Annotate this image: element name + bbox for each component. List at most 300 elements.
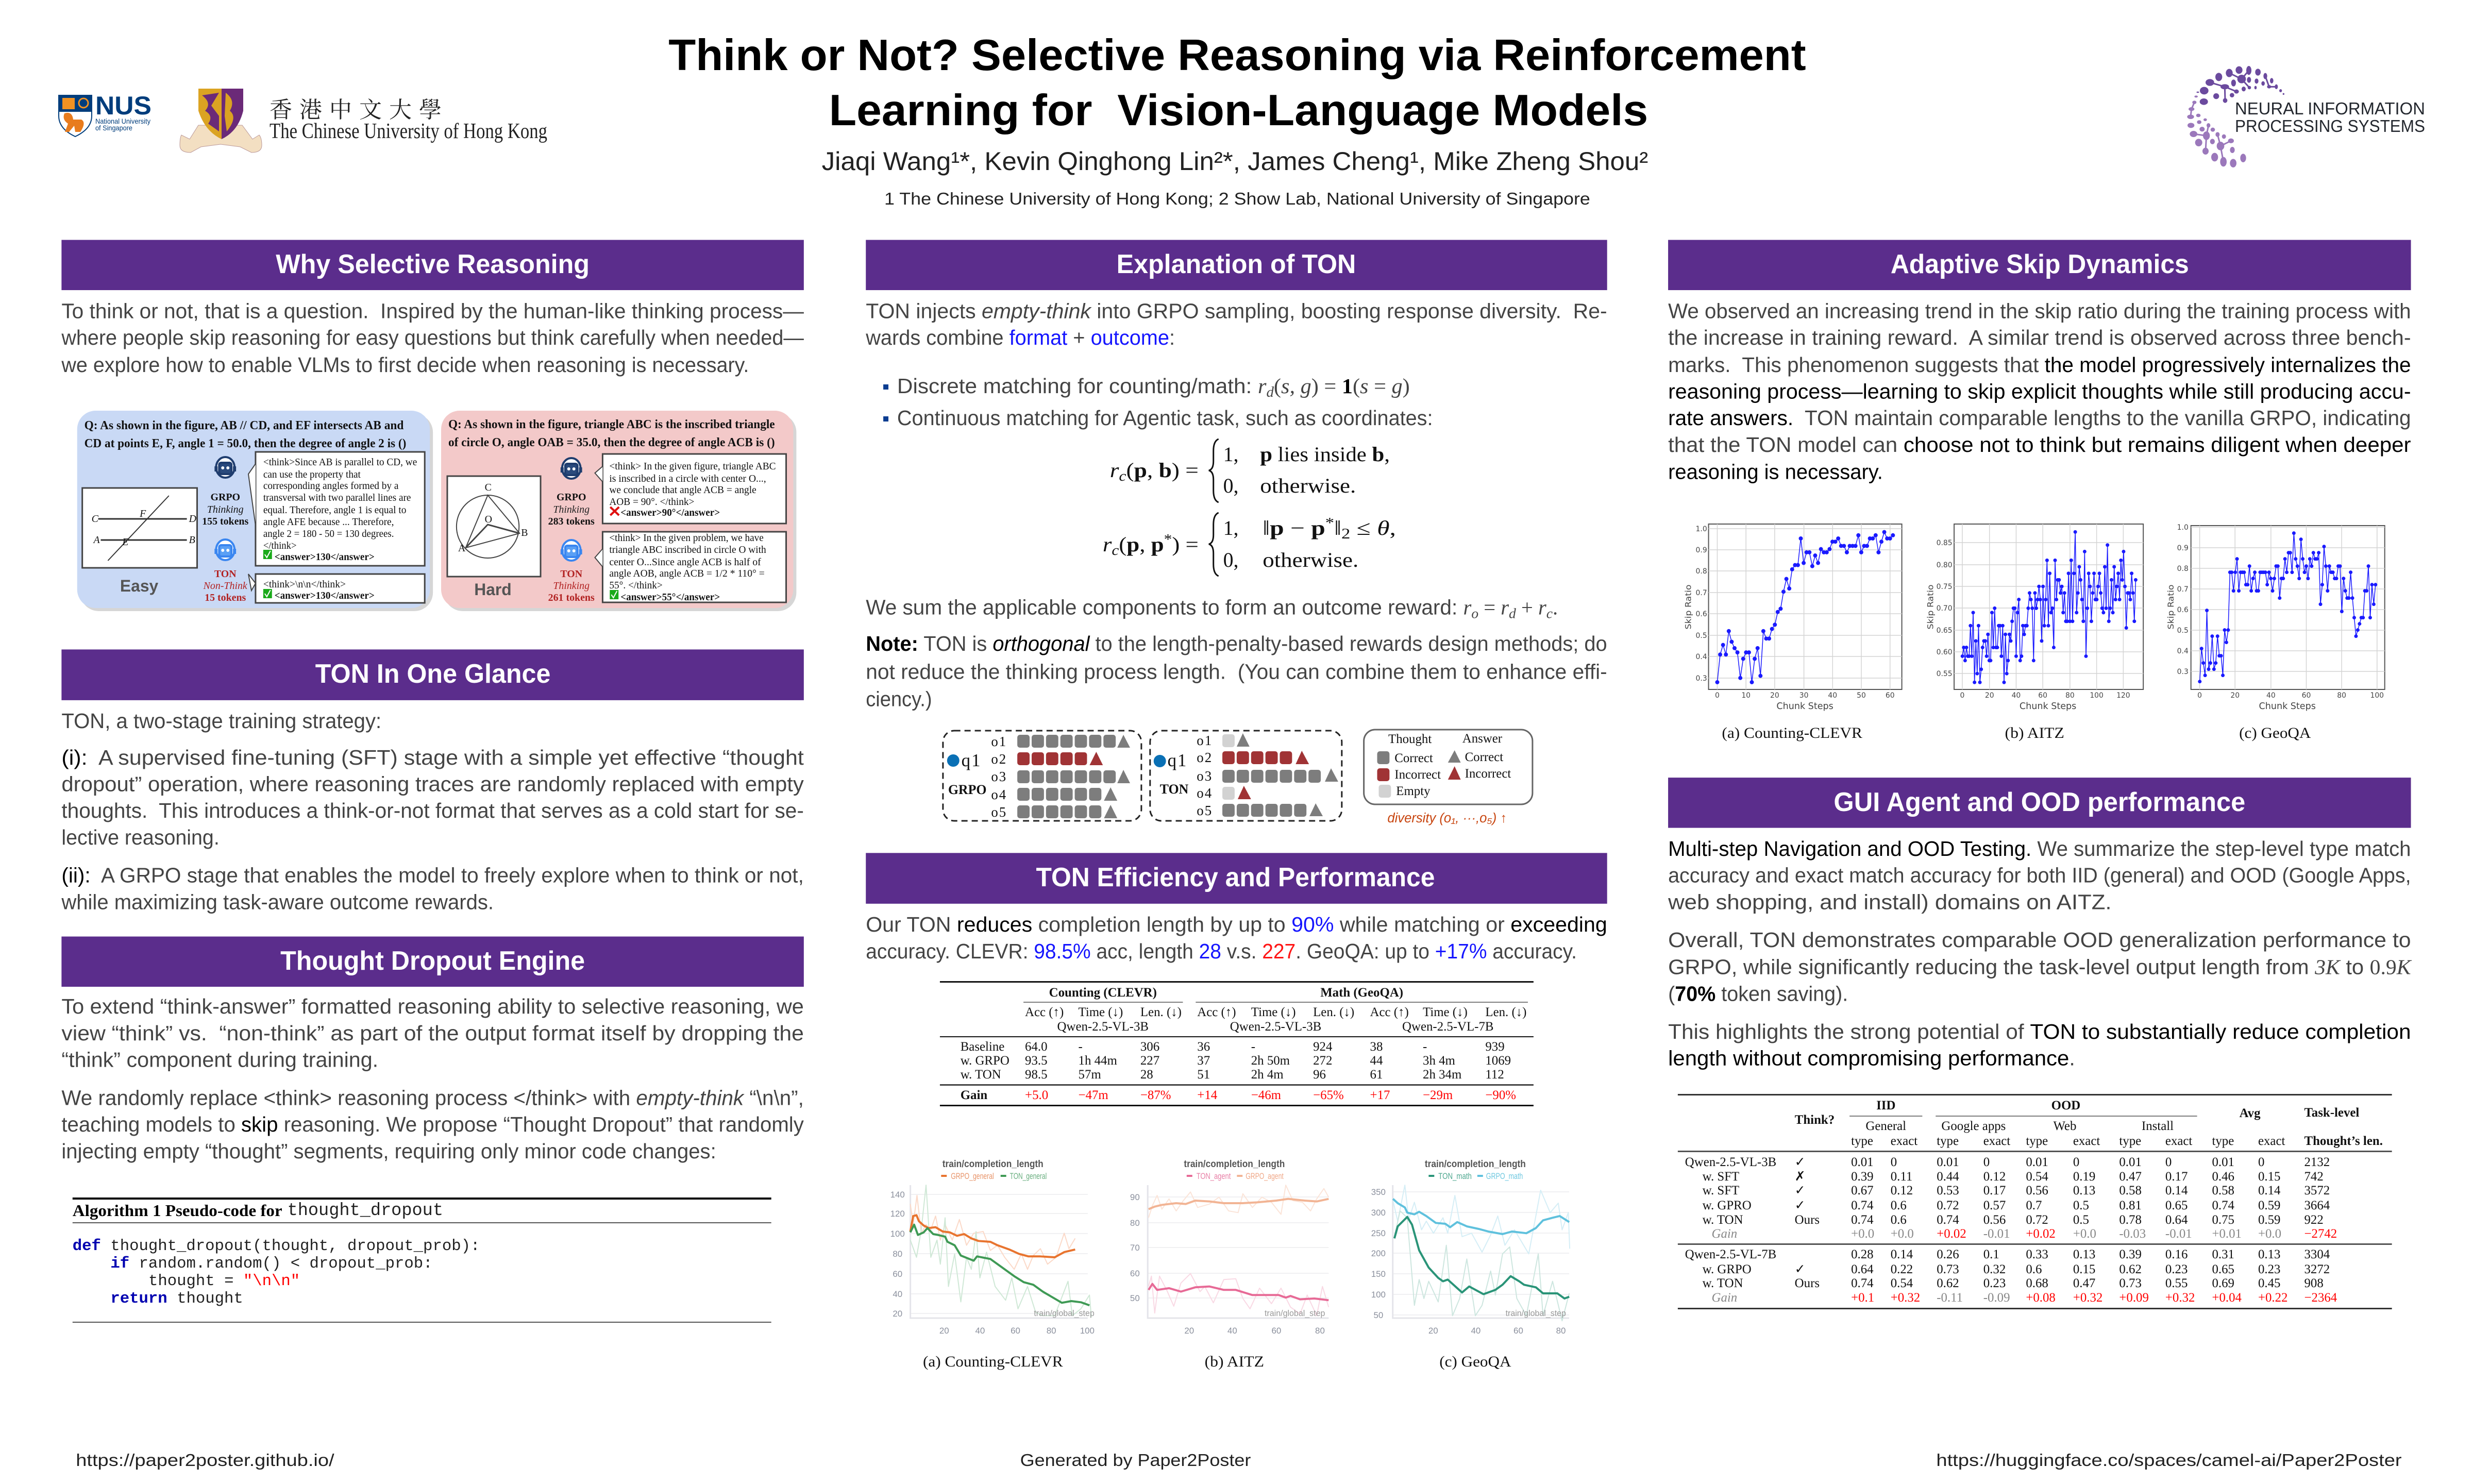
table: efficiency results: 2h 50m <box>1251 1054 1290 1068</box>
text block: outcome reward and note: ciency.) <box>866 687 932 711</box>
chart: skip ratio Counting-CLEVR: 20 <box>1770 692 1779 700</box>
bullet list with equations: Discrete matching for counting/math: r <box>897 374 1266 398</box>
table: OOD results: type <box>1851 1134 1873 1148</box>
text block: skip trend: We observed an increasing trend in the skip ratio during the training process with <box>1668 299 2411 323</box>
chart: skip ratio Counting-CLEVR: 0.5 <box>1696 632 1707 640</box>
GRPO samples <box>943 731 1141 821</box>
table: efficiency results: 37 <box>1197 1054 1210 1068</box>
table: OOD results: 0.23 <box>2258 1262 2280 1276</box>
table: OOD results: 0.7 <box>2026 1199 2042 1212</box>
table: efficiency results: 272 <box>1313 1054 1332 1068</box>
chart: skip ratio AITZ: 0.60 <box>1937 648 1953 656</box>
table: OOD results: exact <box>1891 1134 1917 1148</box>
table: OOD results: 0.13 <box>2073 1184 2095 1198</box>
text block: outcome reward and note: . <box>1553 596 1558 619</box>
table: OOD results: 0.31 <box>2212 1247 2234 1261</box>
text block: two-stage strategy: (i): A supervised fine-tuning (SFT) stage with a simple yet effective “thought <box>61 746 804 769</box>
chart: skip ratio GeoQA <box>2166 524 2385 741</box>
figure: easy example: <answer>130</answer> <box>275 590 375 601</box>
figure: easy example: corresponding angles formed by a <box>263 480 399 492</box>
figure: hard example: TON <box>560 568 583 580</box>
chart: completion length Counting-CLEVR: 80 <box>893 1249 902 1259</box>
chart: skip ratio Counting-CLEVR: 10 <box>1741 692 1751 700</box>
TON samples <box>1150 731 1342 821</box>
chart: skip ratio Counting-CLEVR: 0.4 <box>1696 653 1707 661</box>
table: OOD results: 0.74 <box>1851 1213 1874 1227</box>
text block: intro: TON injects empty-think into GRPO sampling, boosting response diversity. Re- <box>866 299 1607 323</box>
table: OOD results: 0 <box>2165 1155 2172 1169</box>
chart: completion length Counting-CLEVR: train/completion_length <box>943 1159 1044 1170</box>
table: OOD results: 0.16 <box>2165 1247 2188 1261</box>
table: OOD results: 0.47 <box>2073 1276 2095 1290</box>
table: efficiency results: - <box>1423 1040 1427 1054</box>
equation: continuous point reward <box>1103 513 1396 576</box>
equation: continuous point reward: 2 <box>1341 526 1350 542</box>
legend: Empty <box>1396 784 1431 798</box>
chart: skip ratio Counting-CLEVR: 1.0 <box>1696 525 1707 533</box>
text block: outcome reward and note <box>866 595 1607 711</box>
panel: thought dropout engine <box>61 936 804 1323</box>
chart: skip ratio AITZ: 0.85 <box>1937 539 1953 547</box>
table: OOD results: 0.47 <box>2119 1170 2142 1184</box>
table: efficiency results: −47m <box>1079 1088 1108 1102</box>
table: efficiency results: 93.5 <box>1025 1054 1048 1068</box>
table: OOD results: OOD <box>2051 1099 2080 1112</box>
figure: hard example: A <box>458 543 466 554</box>
table: OOD results: +0.0 <box>2073 1227 2096 1241</box>
chart: completion length GeoQA: (c) GeoQA <box>1439 1353 1511 1370</box>
table: OOD results: ✓ <box>1795 1262 1806 1276</box>
table: OOD results: +0.09 <box>2119 1291 2149 1305</box>
table: OOD results: +0.32 <box>2073 1291 2102 1305</box>
TON samples: TON <box>1160 782 1189 797</box>
text block: outcome reward and note: = <box>1478 596 1501 619</box>
chart: completion length Counting-CLEVR: GRPO_general <box>951 1171 994 1181</box>
table: efficiency results: 28 <box>1140 1068 1153 1082</box>
chart: completion length AITZ <box>1130 1159 1328 1370</box>
table: OOD results: 0.6 <box>1891 1213 1907 1227</box>
chart: skip ratio GeoQA: 1.0 <box>2177 524 2189 532</box>
heading: explanation of TON: Explanation of TON <box>1117 249 1356 279</box>
GRPO samples: o3 <box>991 769 1007 784</box>
figure: hard example: is inscribed in a circle with center O..., <box>609 473 766 484</box>
chart: completion length GeoQA: 40 <box>1471 1326 1481 1336</box>
chart: completion length Counting-CLEVR: 100 <box>1080 1326 1095 1336</box>
chart: skip ratio Counting-CLEVR: Skip Ratio <box>1684 584 1693 630</box>
table: OOD results: w. GRPO <box>1703 1262 1752 1276</box>
table: efficiency results: +14 <box>1197 1088 1218 1102</box>
text block: outcome reward and note: c <box>1546 605 1553 621</box>
table: OOD results: type <box>1937 1134 1959 1148</box>
chart: completion length AITZ: 60 <box>1272 1326 1281 1336</box>
table: OOD results: +0.02 <box>1937 1227 1966 1241</box>
chart: skip ratio AITZ: 100 <box>2090 692 2104 700</box>
figure: easy example: A <box>93 534 100 546</box>
algorithm: pseudo-code for thought_dropout: return thought <box>110 1290 243 1308</box>
chart: completion length GeoQA: 250 <box>1371 1228 1386 1238</box>
chart: skip ratio Counting-CLEVR: 30 <box>1799 692 1808 700</box>
table: OOD results: 0.12 <box>1983 1170 2006 1184</box>
table: OOD results: 0.01 <box>2119 1155 2142 1169</box>
text block: efficiency summary <box>866 913 1607 963</box>
authors: Jiaqi Wang¹*, Kevin Qinghong Lin²*, James Cheng¹, Mike Zheng Shou² <box>822 147 1648 176</box>
table: OOD results: 742 <box>2304 1170 2324 1184</box>
chart: completion length GeoQA: GRPO_math <box>1486 1171 1523 1181</box>
table: efficiency results: - <box>1079 1040 1083 1054</box>
equation: continuous box reward <box>1110 439 1390 502</box>
figure: easy example: Thinking <box>207 504 244 515</box>
chart: skip ratio GeoQA: 0 <box>2197 692 2202 700</box>
table: OOD results: 0.69 <box>2212 1276 2234 1290</box>
logo: NUS: NUS <box>95 91 152 120</box>
logo: NUS: of Singapore <box>95 124 132 132</box>
TON samples: o3 <box>1197 768 1213 784</box>
text block: intro: wards combine format + outcome: <box>865 326 1175 349</box>
table: OOD results: w. TON <box>1703 1213 1743 1227</box>
text block: two-stage strategy: thoughts. This introduces a think-or-not format that serves as a cold start for se- <box>61 799 804 822</box>
footer <box>76 1451 2402 1470</box>
equation: continuous box reward: ( <box>1126 459 1134 482</box>
table: OOD results: 0.72 <box>2026 1213 2048 1227</box>
table: efficiency results: Qwen-2.5-VL-3B <box>1230 1020 1321 1034</box>
chart: skip ratio AITZ: 80 <box>2065 692 2075 700</box>
table: OOD results: 0.26 <box>1937 1247 1959 1261</box>
logo: NUS <box>59 91 152 137</box>
table: efficiency results: Time (↓) <box>1079 1005 1123 1019</box>
text block: dropout description <box>61 994 804 1163</box>
chart: completion length AITZ: GRPO_agent <box>1246 1171 1284 1181</box>
chart: skip ratio AITZ: 0.65 <box>1937 627 1953 635</box>
figure: hard example: 55°. </think> <box>609 580 663 591</box>
figure: easy example: <think>\n\n</think> <box>263 579 346 590</box>
figure: easy example: F <box>139 508 146 519</box>
chart: completion length GeoQA: 200 <box>1371 1249 1386 1258</box>
text block: efficiency summary: accuracy. CLEVR: 98.5% acc, length 28 v.s. 227. GeoQA: up to +17% accuracy. <box>866 939 1577 963</box>
table: efficiency results: Baseline <box>961 1040 1004 1054</box>
heading: TON in one glance: TON In One Glance <box>315 659 550 688</box>
table: efficiency results: Acc (↑) <box>1197 1005 1236 1019</box>
chart: completion length GeoQA: 100 <box>1371 1290 1386 1300</box>
chart: completion length Counting-CLEVR: 20 <box>893 1309 902 1319</box>
chart: skip ratio GeoQA: 0.3 <box>2177 668 2189 676</box>
table: OOD results: 0.57 <box>1983 1199 2006 1212</box>
table: efficiency results: Len. (↓) <box>1313 1005 1354 1019</box>
heading: adaptive skip dynamics: Adaptive Skip Dynamics <box>1891 249 2189 279</box>
table: OOD results: Install <box>2142 1119 2174 1133</box>
affiliations: 1 The Chinese University of Hong Kong; 2 Show Lab, National University of Singapore <box>884 189 1590 208</box>
chart: completion length AITZ: 50 <box>1130 1293 1140 1303</box>
figure: hard example: <answer>90°</answer> <box>620 507 720 518</box>
figure: hard example: O <box>485 514 492 525</box>
chart: skip ratio GeoQA: 0.4 <box>2177 647 2189 655</box>
table: OOD results: 0.19 <box>2073 1170 2095 1184</box>
table: OOD results: 0.62 <box>1937 1276 1959 1290</box>
figure: easy example: C <box>92 513 99 525</box>
title <box>668 30 1806 134</box>
table: efficiency results: 38 <box>1370 1040 1383 1054</box>
figure: easy example: GRPO <box>210 492 240 503</box>
figure: easy example: 15 tokens <box>205 592 246 603</box>
table: OOD results: 0 <box>1983 1155 1990 1169</box>
equation: continuous point reward: r <box>1103 533 1112 556</box>
table: efficiency results: 2h 34m <box>1423 1068 1461 1082</box>
bullet list with equations: Continuous matching for Agentic task, such as coordinates: <box>897 406 1433 430</box>
chart: skip ratio AITZ: (b) AITZ <box>2005 724 2064 741</box>
figure: easy example: <think>Since AB is parallel to CD, we <box>263 457 417 468</box>
table: OOD results: 0.73 <box>1937 1262 1959 1276</box>
table: OOD results: 0.67 <box>1851 1184 1874 1198</box>
text block: outcome reward and note: r <box>1538 596 1546 619</box>
heading: GUI agent and OOD performance <box>1668 778 2411 828</box>
text block: OOD summary: This highlights the strong potential of TON to substantially reduce completion <box>1668 1020 2411 1043</box>
text block: dropout description: injecting empty “thought” segments, requiring only minor code changes: <box>61 1139 716 1163</box>
chart: completion length GeoQA: 350 <box>1371 1187 1386 1197</box>
chart: skip ratio AITZ: 0.55 <box>1937 670 1953 678</box>
chart: skip ratio GeoQA: 0.6 <box>2177 606 2189 614</box>
figure: hard example: <answer>55°</answer> <box>620 592 720 603</box>
figure: hard example: Thinking <box>553 504 590 515</box>
table: efficiency results: 61 <box>1370 1068 1383 1082</box>
table: OOD results: Gain <box>1712 1227 1737 1241</box>
chart: skip ratio Counting-CLEVR: (a) Counting-CLEVR <box>1722 724 1862 741</box>
algorithm: pseudo-code for thought_dropout <box>73 1198 771 1323</box>
chart: skip ratio AITZ: Skip Ratio <box>1925 584 1935 630</box>
chart: skip ratio GeoQA: 0.5 <box>2177 627 2189 635</box>
chart: completion length Counting-CLEVR: 80 <box>1047 1326 1056 1336</box>
table: efficiency results: 64.0 <box>1025 1040 1048 1054</box>
equation: continuous box reward: c <box>1119 468 1126 484</box>
table: efficiency results: −87% <box>1140 1088 1171 1102</box>
text block: two-stage strategy: lective reasoning. <box>61 825 220 849</box>
legend: Answer <box>1462 732 1503 746</box>
icon: TON robot <box>562 540 581 561</box>
text block: motivation: where people skip reasoning for easy questions but think carefully when needed— <box>61 326 804 349</box>
table: efficiency results: 3h 4m <box>1423 1054 1455 1068</box>
chart: completion length GeoQA: 50 <box>1373 1310 1383 1320</box>
table: OOD results: 0.22 <box>1891 1262 1913 1276</box>
table: efficiency results: Qwen-2.5-VL-3B <box>1057 1020 1149 1034</box>
table: OOD results: Qwen-2.5-VL-7B <box>1685 1247 1776 1261</box>
logo: NeurIPS: PROCESSING SYSTEMS <box>2235 116 2425 136</box>
chart: completion length AITZ: 80 <box>1315 1326 1325 1336</box>
figure: easy example: CD at points E, F, angle 1 = 50.0, then the degree of angle 2 is () <box>85 437 406 450</box>
table: efficiency results: 939 <box>1485 1040 1505 1054</box>
table: OOD results: 0.81 <box>2119 1199 2142 1212</box>
logo: NeurIPS: NEURAL INFORMATION <box>2235 99 2425 118</box>
chart: skip ratio GeoQA: 0.8 <box>2177 565 2189 573</box>
chart: skip ratio AITZ: 0 <box>1960 692 1964 700</box>
legend: Correct <box>1394 751 1433 765</box>
chart: skip ratio AITZ: 0.80 <box>1937 561 1953 569</box>
figure: hard example: 283 tokens <box>548 516 595 527</box>
equation: continuous box reward: p lies inside b, <box>1260 443 1390 466</box>
table: OOD results: 0.01 <box>2026 1155 2048 1169</box>
icon: GRPO robot <box>562 458 581 479</box>
table: OOD results: 3572 <box>2304 1184 2330 1198</box>
table: OOD results: 0.74 <box>2212 1199 2234 1212</box>
GRPO samples: o5 <box>991 804 1007 820</box>
text block: OOD summary: web shopping, and install) domains on AITZ. <box>1668 890 2112 914</box>
figure: easy example: transversal with two parallel lines are <box>263 492 411 503</box>
text block: OOD summary: accuracy and exact match accuracy for both IID (general) and OOD (Google Apps, <box>1668 864 2411 887</box>
table: OOD results: 0.68 <box>2026 1276 2048 1290</box>
table: efficiency results: Time (↓) <box>1423 1005 1468 1019</box>
table: OOD results: 0 <box>2073 1155 2079 1169</box>
table: OOD results: +0.0 <box>1851 1227 1874 1241</box>
table: OOD results: exact <box>2073 1134 2100 1148</box>
equation: continuous box reward: 1, <box>1223 443 1238 466</box>
chart: completion length Counting-CLEVR: 140 <box>890 1190 905 1200</box>
algorithm: pseudo-code for thought_dropout: if random.random() < dropout_prob: <box>110 1255 433 1273</box>
GRPO samples: o4 <box>991 787 1007 802</box>
chart: skip ratio Counting-CLEVR: Chunk Steps <box>1776 701 1833 712</box>
legend: Incorrect <box>1465 767 1511 781</box>
table: OOD results: 0.28 <box>1851 1247 1874 1261</box>
text block: intro <box>865 299 1607 349</box>
heading: TON in one glance <box>61 649 804 700</box>
figure: hard example: we conclude that angle ACB = angle <box>609 484 756 496</box>
table: OOD results: 0.64 <box>1851 1262 1874 1276</box>
table: OOD results: 0.75 <box>2212 1213 2234 1227</box>
text block: motivation <box>61 299 804 377</box>
table: OOD results: 0.39 <box>2119 1247 2142 1261</box>
chart: skip ratio Counting-CLEVR: 0.6 <box>1696 610 1707 618</box>
table: OOD results: Thought’s len. <box>2304 1134 2383 1148</box>
chart: skip ratio GeoQA: 60 <box>2302 692 2311 700</box>
table: OOD results: 0.01 <box>1937 1155 1959 1169</box>
text block: skip trend <box>1668 299 2411 484</box>
chart: skip ratio Counting-CLEVR: 40 <box>1828 692 1837 700</box>
table: OOD results: 0.14 <box>2165 1184 2188 1198</box>
table: OOD results: 0.5 <box>2073 1213 2089 1227</box>
chart: completion length AITZ: 40 <box>1227 1326 1237 1336</box>
figure: easy example: <answer>130</answer> <box>275 551 375 563</box>
chart: completion length AITZ: TON_agent <box>1197 1171 1231 1181</box>
table: OOD results: 0.44 <box>1937 1170 1959 1184</box>
chart: completion length Counting-CLEVR: 60 <box>893 1269 902 1279</box>
chart: skip ratio AITZ: 120 <box>2116 692 2130 700</box>
chart: completion length AITZ: train/completion_length <box>1184 1159 1285 1170</box>
title: Think or Not? Selective Reasoning via Reinforcement <box>668 30 1806 79</box>
table: OOD results: 0.73 <box>2119 1276 2142 1290</box>
table: OOD results: +0.02 <box>2026 1227 2056 1241</box>
footer link: demo: https://huggingface.co/spaces/camel-ai/Paper2Poster <box>1936 1451 2402 1470</box>
table: efficiency results: Gain <box>961 1088 987 1102</box>
table: OOD results: Task-level <box>2304 1106 2359 1120</box>
text block: two-stage strategy: while maximizing task-aware outcome rewards. <box>61 890 494 914</box>
chart: completion length GeoQA: 80 <box>1556 1326 1566 1336</box>
heading: TON efficiency and performance <box>866 853 1607 904</box>
table: OOD results: 0.15 <box>2073 1262 2095 1276</box>
equation: continuous point reward: c <box>1112 543 1119 559</box>
legend: Correct <box>1465 750 1503 764</box>
equation: continuous box reward: p, b) = <box>1134 459 1195 482</box>
table: OOD results: 2132 <box>2304 1155 2330 1169</box>
logo: CUHK: The Chinese University of Hong Kong <box>270 120 547 143</box>
table: efficiency results: Acc (↑) <box>1025 1005 1064 1019</box>
figure: hard example: AOB = 90°. </think> <box>609 496 694 508</box>
chart: completion length Counting-CLEVR: 60 <box>1011 1326 1020 1336</box>
GRPO samples: q1 <box>962 750 981 770</box>
chart: skip ratio Counting-CLEVR <box>1684 524 1902 741</box>
chart: completion length GeoQA: 150 <box>1371 1269 1386 1279</box>
table: OOD results: type <box>2026 1134 2048 1148</box>
table: OOD results: 0.12 <box>1891 1184 1913 1198</box>
table: OOD results: 0.58 <box>2212 1184 2234 1198</box>
table: OOD results: exact <box>1983 1134 2010 1148</box>
table: efficiency results: 57m <box>1079 1068 1101 1082</box>
bullet list with equations: s, g) = 1(s = g) <box>1281 375 1409 398</box>
chart: completion length Counting-CLEVR: 20 <box>939 1326 949 1336</box>
legend: Thought <box>1388 732 1432 746</box>
table: OOD results: -0.09 <box>1983 1291 2010 1305</box>
figure: easy example: TON <box>214 568 237 580</box>
table: OOD results: 0.14 <box>2258 1184 2281 1198</box>
icon: GRPO robot <box>216 457 234 478</box>
figure: hard example: center O...Since angle ACB is half of <box>609 556 761 568</box>
table: OOD results: 0.58 <box>2119 1184 2142 1198</box>
table: efficiency results: +5.0 <box>1025 1088 1048 1102</box>
table: OOD results: 0.13 <box>2258 1247 2280 1261</box>
table: OOD results: 0.23 <box>2165 1262 2188 1276</box>
figure: hard example: Q: As shown in the figure, triangle ABC is the inscribed triangle <box>448 418 775 431</box>
logo: CUHK <box>180 89 547 153</box>
table: OOD results: 0.59 <box>2258 1199 2280 1212</box>
chart: skip ratio GeoQA: 80 <box>2337 692 2346 700</box>
table: OOD results: Qwen-2.5-VL-3B <box>1685 1155 1776 1169</box>
text block: dropout description: “think” component during training. <box>61 1048 378 1072</box>
table: OOD results: 0.56 <box>1983 1213 2006 1227</box>
equation: continuous point reward: ‖p − p <box>1263 516 1322 539</box>
figure: hard example: C <box>485 482 492 493</box>
bullet list with equations: d <box>1267 384 1274 400</box>
chart: skip ratio GeoQA: 0.7 <box>2177 585 2189 594</box>
table: efficiency results: 51 <box>1197 1068 1210 1082</box>
panel: adaptive skip dynamics <box>1668 240 2411 741</box>
text block: OOD summary: Multi-step Navigation and OOD Testing. We summarize the step-level type match <box>1668 837 2411 861</box>
chart: skip ratio AITZ <box>1925 524 2143 741</box>
text block: outcome reward and note: We sum the applicable components to form an outcome reward: r <box>866 595 1471 619</box>
title: Learning for Vision-Language Models <box>829 86 1648 134</box>
TON samples: o2 <box>1197 750 1213 765</box>
chart: completion length Counting-CLEVR: 120 <box>890 1209 905 1219</box>
GRPO samples: o1 <box>991 734 1007 749</box>
text block: outcome reward and note: o <box>1471 605 1478 621</box>
table: OOD results: 0.64 <box>2165 1213 2188 1227</box>
equation: continuous point reward: ( <box>1119 533 1126 556</box>
table: efficiency results: 112 <box>1485 1068 1504 1082</box>
table: OOD results: 0.56 <box>2026 1184 2048 1198</box>
chart: skip ratio AITZ: 0.70 <box>1937 604 1953 613</box>
text block: skip trend: marks. This phenomenon suggests that the model progressively internalizes the <box>1668 353 2411 377</box>
TON samples: o4 <box>1197 785 1213 801</box>
text block: outcome reward and note: + <box>1516 596 1538 619</box>
table: OOD results: 0.74 <box>1851 1276 1874 1290</box>
table: efficiency results: Qwen-2.5-VL-7B <box>1402 1020 1493 1034</box>
text block: dropout description: To extend “think-answer” formatted reasoning ability to selective reasoning, we <box>61 994 804 1018</box>
chart: completion length GeoQA: 20 <box>1428 1326 1438 1336</box>
table: OOD results: 0.74 <box>1851 1199 1874 1212</box>
equation: continuous point reward: 1, <box>1223 516 1238 539</box>
text block: outcome reward and note: Note: TON is orthogonal to the length-penalty-based rewards design methods; do <box>866 632 1607 655</box>
logo: NeurIPS <box>2187 66 2425 167</box>
table: OOD results: +0.32 <box>2165 1291 2195 1305</box>
footer credit: Generated by Paper2Poster <box>1020 1451 1251 1470</box>
equation: continuous point reward: ) = <box>1172 533 1199 556</box>
text block: outcome reward and note: d <box>1509 605 1516 621</box>
equation: continuous box reward: otherwise. <box>1260 474 1356 497</box>
icon: TON robot <box>216 539 234 560</box>
